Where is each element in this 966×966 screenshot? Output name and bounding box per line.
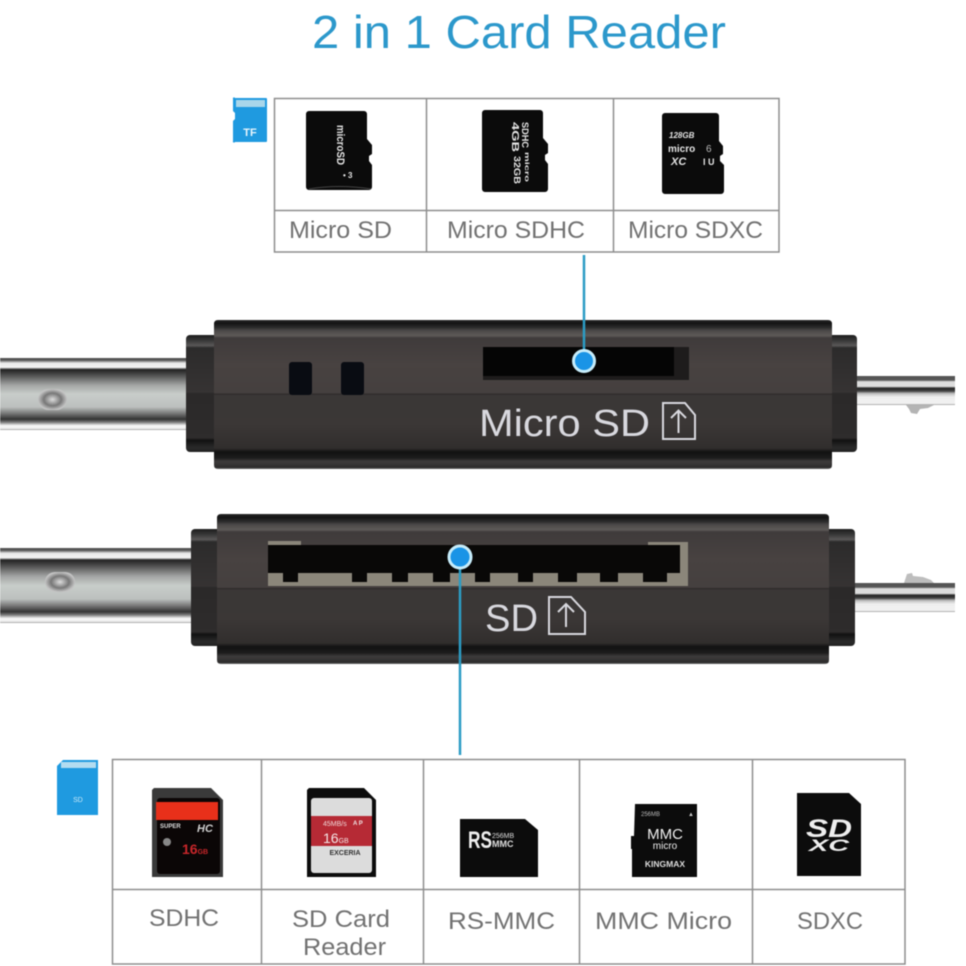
card: RS-MMC [460, 819, 538, 877]
card: Micro SDHC: SDHC [520, 122, 530, 148]
card: SD Card Reader: 16GB [323, 830, 349, 846]
card: SDXC: XC [807, 836, 850, 855]
label: Micro SDHC: Micro SDHC [447, 217, 585, 244]
callout dot [449, 546, 471, 568]
USB-A plug [0, 358, 188, 430]
body [217, 514, 829, 664]
card: SDHC: HC [197, 823, 214, 835]
label: SD Card Reader: Reader [303, 934, 386, 961]
card: Micro SD: • 3 [343, 171, 353, 180]
micro USB plug [855, 376, 955, 414]
card: SDXC [797, 793, 861, 876]
slot label: Micro SD [479, 403, 650, 445]
card: Micro SDHC [482, 110, 548, 192]
card: Micro SDHC: 32GB [512, 156, 522, 185]
icon: insert arrow [663, 403, 695, 439]
micro SD slot [483, 347, 689, 380]
callout line [459, 557, 461, 755]
card: SDHC: SUPER [160, 824, 181, 830]
card: Micro SDXC: XC [670, 156, 687, 168]
card: SDHC [152, 788, 223, 877]
panel: SD card types table [112, 759, 905, 964]
card: Micro SDXC [662, 113, 724, 194]
card: Micro SD: microSD [334, 125, 346, 165]
end caps [191, 529, 855, 646]
card: Micro SD [306, 111, 372, 190]
micro USB plug [853, 573, 955, 612]
label: Micro SD: Micro SD [289, 217, 392, 244]
card: SD Card Reader: A P [353, 821, 363, 827]
card: Micro SDXC: I U [703, 157, 715, 167]
card: Micro SDHC: 4GB [509, 122, 520, 152]
callout dot [574, 350, 594, 372]
card: Micro SDHC: micro [523, 152, 529, 183]
label: SD Card Reader [292, 906, 390, 961]
card: Micro SDXC: micro [668, 144, 695, 155]
card: MMC Micro: 256MB [641, 812, 660, 818]
label: Micro SDXC: Micro SDXC [628, 217, 763, 244]
end caps [186, 335, 857, 452]
card: RS-MMC: 256MB [492, 833, 515, 840]
icon: SD card [57, 760, 98, 815]
card: MMC Micro: ▲ [688, 812, 694, 818]
card: SD Card Reader: EXCERIA [329, 850, 361, 857]
label: SDXC: SDXC [797, 908, 863, 935]
card: SDHC: 16GB [182, 841, 208, 857]
icon: TF card [233, 97, 267, 143]
label: MMC Micro: MMC Micro [595, 908, 732, 935]
card reader: micro SD side [0, 255, 955, 469]
USB-A plug [0, 548, 193, 623]
card: MMC Micro: micro [653, 841, 678, 852]
buttons [289, 362, 364, 395]
label: RS-MMC: RS-MMC [448, 908, 555, 935]
card: MMC Micro: KINGMAX [645, 859, 685, 869]
SD slot [268, 541, 688, 586]
card: SD Card Reader [307, 788, 376, 877]
card: SD Card Reader: 45MB/s [323, 821, 347, 828]
callout line [583, 255, 585, 361]
panel: micro SD card types table [274, 98, 779, 252]
card: Micro SDXC: 128GB [669, 131, 695, 140]
title: 2 in 1 Card Reader [312, 6, 726, 58]
label: SDHC: SDHC [149, 905, 219, 932]
card: MMC Micro: MMC [647, 826, 683, 843]
card: SDXC: SD [806, 815, 852, 843]
card: Micro SDXC: 6 [706, 144, 712, 155]
slot label: SD [485, 598, 538, 640]
icon: insert arrow [549, 597, 585, 634]
icon: SD card: SD [73, 797, 83, 804]
card: RS-MMC: MMC [492, 839, 514, 849]
body [214, 320, 832, 469]
card: RS-MMC: RS [468, 827, 492, 854]
icon: TF card: TF [243, 127, 257, 139]
card: MMC Micro [631, 804, 697, 877]
card reader: SD side [0, 514, 955, 755]
label: SD Card Reader: SD Card [292, 906, 390, 933]
